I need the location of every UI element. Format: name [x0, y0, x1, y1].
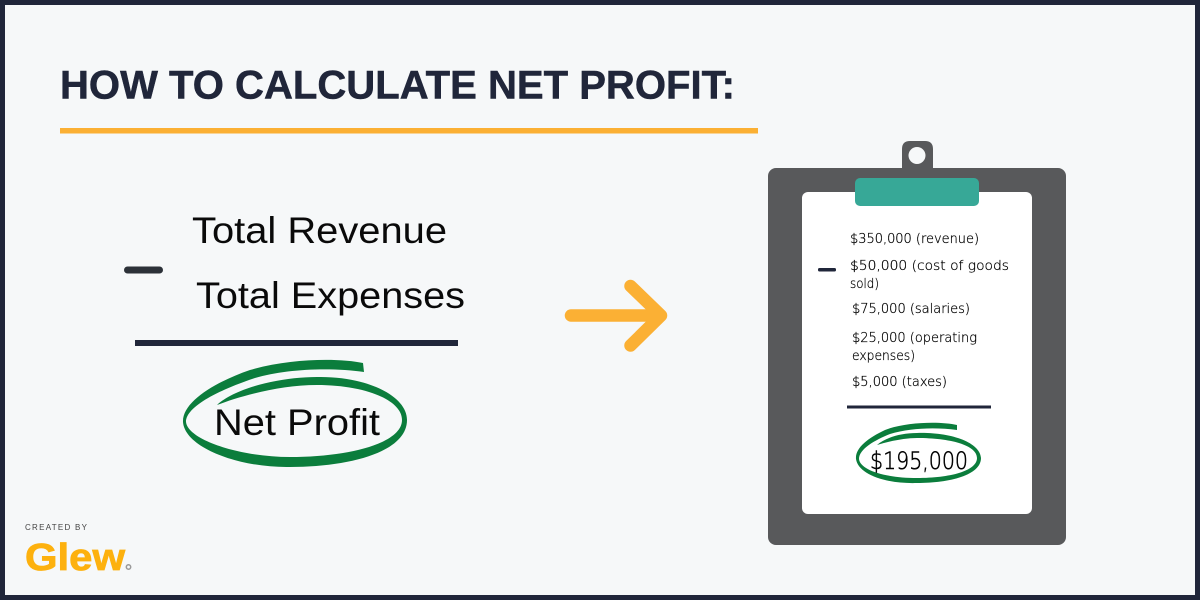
operating expenses continuation: expenses) — [852, 349, 915, 364]
calculation lines — [818, 232, 1009, 390]
cost of goods sold line: $50,000 (cost of goods — [850, 259, 1009, 274]
clipboard net profit circled — [856, 423, 981, 483]
title underline — [60, 128, 758, 134]
clipboard board — [768, 168, 1066, 545]
cost of goods sold continuation: sold) — [850, 277, 879, 292]
net profit amount: $195,000 — [870, 447, 968, 475]
revenue line: $350,000 (revenue) — [850, 232, 979, 247]
clipboard hook — [902, 141, 933, 170]
arrow — [571, 286, 661, 346]
created by label: CREATED BY — [25, 523, 88, 532]
net profit label: Net Profit — [214, 402, 381, 443]
teal clip — [855, 178, 979, 206]
clipboard sum line — [847, 406, 991, 408]
minus sign — [818, 268, 836, 272]
formula: total expenses: Total Expenses — [196, 275, 465, 316]
paper sheet — [802, 192, 1032, 514]
formula: net profit equation — [124, 210, 465, 467]
operating expenses line: $25,000 (operating — [852, 331, 977, 346]
formula: net profit circled — [183, 360, 407, 467]
formula: minus sign — [124, 266, 163, 274]
logo dot — [126, 565, 131, 569]
green hand-drawn circle — [183, 360, 407, 467]
salaries line: $75,000 (salaries) — [852, 302, 970, 317]
formula: total revenue: Total Revenue — [192, 210, 447, 251]
title: HOW TO CALCULATE NET PROFIT: — [60, 64, 735, 108]
formula: sum line — [135, 340, 458, 346]
Glew wordmark: Glew — [25, 537, 125, 579]
taxes line: $5,000 (taxes) — [852, 375, 947, 390]
green hand-drawn circle — [856, 423, 981, 483]
clipboard — [768, 141, 1066, 545]
logo: created by Glew — [25, 523, 131, 579]
